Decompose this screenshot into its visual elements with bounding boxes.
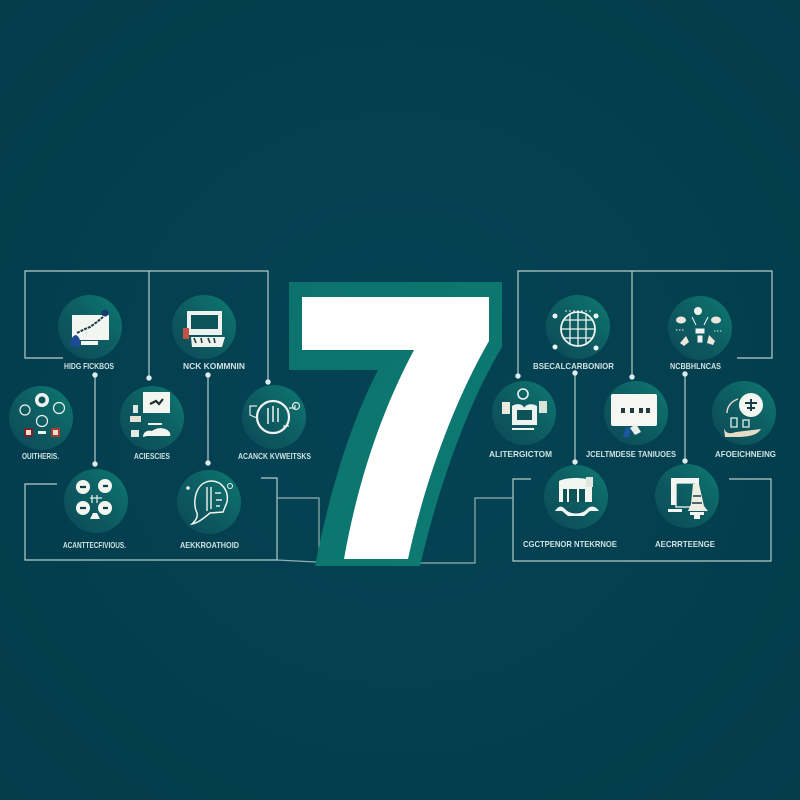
connector lines: right group	[420, 271, 772, 563]
icon circle: laptop	[172, 295, 236, 359]
icon circle: globe	[546, 295, 610, 359]
label: bottom left 1: ACANTTECFIVIOUS.	[63, 540, 126, 550]
label: bottom right 2: AECRRTEENGE	[655, 539, 715, 549]
icon circle: radial cluster	[668, 296, 732, 360]
label: top right 2: NCBBHLNCAS	[670, 361, 721, 371]
big number seven	[289, 282, 502, 566]
icon circle: head profile	[177, 470, 241, 534]
label: middle right 3: AFOEICHNEING	[715, 449, 776, 459]
label: middle left 1: OUITHERIS.	[22, 451, 59, 461]
label: middle right 1: ALITERGICTOM	[489, 449, 552, 459]
icon circle: message card	[604, 381, 668, 445]
icon circle: open book with people	[492, 381, 556, 445]
connector dots: left group	[92, 372, 271, 467]
label: bottom left 2: AEKKROATHOID	[180, 540, 239, 550]
label: bottom right 1: CGCTPENOR NTEKRNOE	[523, 539, 617, 549]
label: middle left 3: ACANCK KVWEITSKS	[238, 451, 311, 461]
label: middle left 2: ACIESCIES	[134, 451, 170, 461]
icon circle: chart board	[58, 295, 122, 359]
label: middle right 2: JCELTMDESE TANIUOES	[586, 449, 676, 459]
icon circle: clover network	[64, 469, 128, 533]
label: top left 1: HIDG FICKBOS	[64, 361, 114, 371]
icon circle: robot face	[544, 465, 608, 529]
icon circle: science board	[120, 386, 184, 450]
icon circle: document and bell	[655, 464, 719, 528]
icon circle: ring with marks	[242, 385, 306, 449]
connector lines: left group	[25, 271, 319, 563]
label: top right 1: BSECALCARBONIOR	[533, 361, 614, 371]
icon circle: people cluster	[9, 386, 73, 450]
connector dots: right group	[515, 370, 688, 465]
label: top left 2: NCK KOMMNIN	[183, 361, 245, 371]
icon circle: puzzle and tools	[712, 381, 776, 445]
